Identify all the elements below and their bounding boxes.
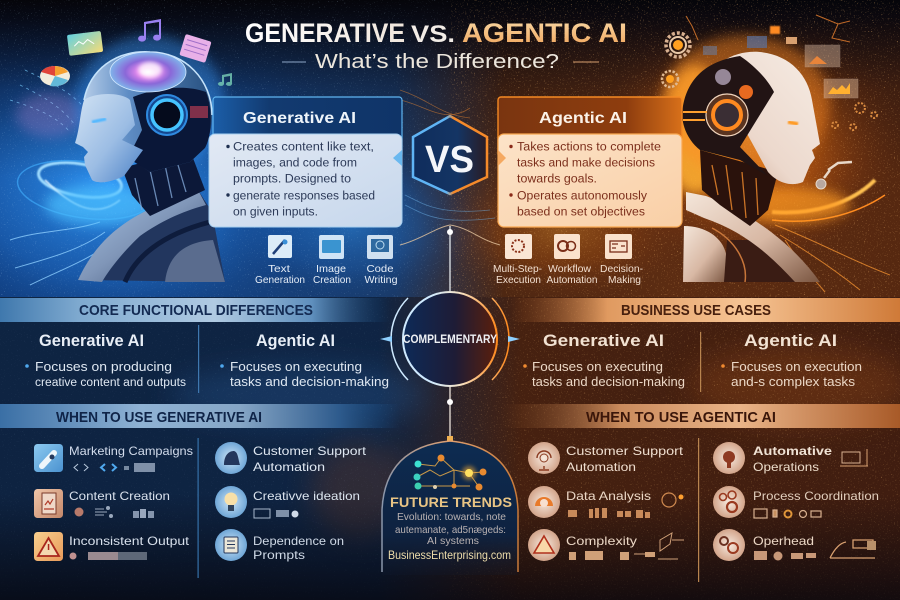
- bullet text: and-s complex tasks: [731, 374, 855, 389]
- item: process coordination: [713, 486, 879, 518]
- panel body with description: towards goals.: [517, 172, 597, 186]
- website: BusinessEnterprising.com: [388, 548, 511, 562]
- item: creative ideation: [215, 486, 360, 518]
- title: AGENTIC AI: [462, 18, 627, 48]
- label: decision making: Making: [608, 274, 641, 286]
- floating agentic icons: [662, 15, 877, 189]
- item: customer support automation: Customer Support: [566, 444, 684, 458]
- item: overhead: Operhead: [753, 534, 814, 548]
- label: code writing: Code: [366, 263, 394, 275]
- icon: robot arm: [816, 162, 852, 189]
- capability icons: agentic: [493, 234, 643, 286]
- list: agentic use cases, first column: [528, 442, 684, 561]
- item: complexity: Complexity: [566, 534, 637, 548]
- heading band: when to use generative AI: WHEN TO USE GENERATIVE AI: [56, 409, 262, 426]
- item: customer support automation: Customer Support: [253, 444, 367, 458]
- shoulder: [78, 190, 225, 282]
- bullet text: Focuses on executing: [532, 359, 663, 374]
- label: multi-step execution: Multi-Step-: [493, 263, 542, 275]
- VS hexagon: [413, 116, 487, 194]
- face: [75, 94, 143, 182]
- item: overhead: [713, 529, 876, 561]
- icon: image card: [67, 31, 103, 56]
- bullet text: tasks and decision-making: [230, 374, 389, 389]
- icon: decision making: [605, 234, 632, 259]
- capability icons: generative: [255, 235, 398, 286]
- panel body with description: [209, 134, 402, 227]
- mechanical skull interior: [128, 88, 211, 172]
- label: workflow automation: Automation: [546, 274, 598, 286]
- floating media icons: [40, 19, 232, 86]
- item: dependence on prompts: Prompts: [253, 548, 305, 562]
- bullet text: tasks and decision-making: [532, 374, 685, 389]
- bullet text: [220, 359, 389, 389]
- label: decision making: [600, 263, 643, 286]
- title: GENERATIVE: [245, 18, 405, 48]
- skull glass dome: [84, 52, 212, 172]
- item: inconsistent output: [34, 532, 190, 561]
- heading: agentic: Agentic AI: [744, 331, 837, 350]
- label: image creation: [313, 263, 351, 286]
- label: multi-step execution: Execution: [496, 274, 541, 286]
- item: automative operations: Automative: [753, 444, 832, 458]
- heading band: core functional differences: [0, 298, 390, 322]
- label: code writing: [364, 263, 398, 286]
- complementary ring: [380, 292, 520, 386]
- robot: agentic AI head: [660, 35, 890, 292]
- heading: Agentic AI: Agentic AI: [539, 110, 627, 127]
- label: text generation: Generation: [255, 274, 305, 286]
- heading band: business use cases: [510, 298, 900, 322]
- panel body with description: Operates autonomously: [517, 188, 648, 202]
- item: creative ideation: Creativve ideation: [253, 489, 360, 503]
- heading band: business use cases: BUSINESS USE CASES: [621, 302, 771, 319]
- icon: area chart panel: [805, 45, 840, 67]
- item: process coordination: Process Coordination: [753, 489, 879, 503]
- description: AI systems: [427, 535, 479, 547]
- list: generative use cases, first column: [34, 444, 193, 561]
- description: autemanate, ad5nægeds:: [395, 524, 506, 536]
- heading band: when to use agentic AI: [500, 404, 900, 428]
- panel: Generative AI: [209, 97, 402, 227]
- list: generative use cases, second column: [215, 442, 367, 562]
- panel body with description: [498, 134, 682, 227]
- column: core differences: [25, 325, 389, 393]
- connector line with nodes: [447, 226, 453, 444]
- panel body with description: based on set objectives: [517, 204, 645, 218]
- icon: workflow automation: [554, 234, 580, 259]
- panel body with description: on given inputs.: [233, 204, 318, 218]
- bullet text: Focuses on executing: [230, 359, 362, 374]
- list: agentic use cases, second column: [713, 442, 879, 561]
- network graphic: [414, 454, 486, 490]
- item: customer support automation: [215, 442, 367, 474]
- panel body with description: images, and code from: [233, 156, 357, 170]
- robot: generative AI head: [10, 35, 225, 285]
- glowing brain: [110, 52, 186, 92]
- icon: image creation: [319, 235, 344, 259]
- label: text generation: [255, 263, 305, 286]
- bullet text: [25, 359, 186, 389]
- bullet text: [523, 359, 685, 389]
- item: data analysis: [528, 486, 684, 518]
- label: workflow automation: Workflow: [548, 263, 591, 275]
- bullet text: Focuses on producing: [35, 359, 172, 374]
- swirl and sparks: [772, 180, 890, 292]
- item: customer support automation: Automation: [566, 460, 636, 474]
- heading band: when to use generative AI: [0, 404, 400, 428]
- item: automative operations: [713, 442, 868, 474]
- label: text generation: Text: [268, 263, 290, 275]
- mechanical skull section: [682, 56, 774, 176]
- icon: music note: [138, 19, 161, 42]
- item: content creation: Content Creation: [69, 489, 170, 503]
- item: marketing campaigns: [34, 444, 193, 472]
- icon: small note: [218, 73, 232, 86]
- title: [245, 18, 627, 48]
- neck: [122, 150, 205, 216]
- icon: small gear: [662, 71, 678, 87]
- heading: generative: Generative AI: [543, 331, 664, 350]
- icon: document: [179, 34, 212, 63]
- label: decision making: Decision-: [600, 263, 643, 275]
- item: content creation: [34, 489, 170, 518]
- icon: multi-step execution: [505, 234, 532, 259]
- description: Evolution: towards, note: [397, 511, 506, 523]
- item: dependence on prompts: Dependence on: [253, 534, 344, 548]
- bullet text: creative content and outputs: [35, 377, 186, 389]
- energy waves behind panels: [400, 90, 500, 245]
- icon: screens: [703, 26, 797, 55]
- icon: node network: [686, 15, 850, 42]
- heading band: when to use agentic AI: WHEN TO USE AGENTIC AI: [586, 409, 776, 426]
- subtitle: What’s the Difference?: [315, 50, 559, 73]
- bullet text: [721, 359, 862, 389]
- column: business use cases: [523, 331, 862, 392]
- complementary ring: COMPLEMENTARY: [403, 334, 497, 346]
- item: complexity: [528, 529, 684, 561]
- item: dependence on prompts: [215, 529, 344, 562]
- panel body with description: prompts. Designed to: [233, 172, 351, 186]
- icon: bar chart panel: [824, 79, 858, 98]
- panel: Agentic AI: [498, 97, 682, 227]
- heading: future trends: FUTURE TRENDS: [390, 494, 512, 510]
- swirl and data streams: [10, 70, 156, 285]
- label: workflow automation: [546, 263, 598, 286]
- item: customer support automation: Automation: [253, 460, 325, 474]
- panel body with description: tasks and make decisions: [517, 156, 655, 170]
- heading band: core functional differences: CORE FUNCTIONAL DIFFERENCES: [79, 302, 313, 319]
- icon: text generation: [268, 235, 292, 258]
- label: code writing: Writing: [364, 274, 398, 286]
- label: image creation: Image: [316, 263, 346, 275]
- item: inconsistent output: Inconsistent Output: [69, 534, 190, 548]
- heading: agentic: Agentic AI: [256, 331, 335, 350]
- ear ring: [146, 94, 188, 136]
- neck: [700, 150, 778, 226]
- icon: large gear: [666, 33, 690, 57]
- label: multi-step execution: [493, 263, 542, 286]
- item: marketing campaigns: Marketing Campaigns: [69, 444, 193, 458]
- VS hexagon: VS: [425, 139, 474, 181]
- ear ring: [706, 94, 748, 136]
- description: [395, 511, 506, 547]
- icon: code writing: [367, 235, 393, 259]
- item: data analysis: Data Analysis: [566, 489, 651, 503]
- bullet text: Focuses on execution: [731, 359, 862, 374]
- item: automative operations: Operations: [753, 460, 819, 474]
- card: future trends: [382, 441, 518, 575]
- title: VS.: [411, 21, 455, 48]
- icon: pie chart: [40, 66, 70, 86]
- panel body with description: Creates content like text,: [233, 140, 374, 154]
- label: image creation: Creation: [313, 274, 351, 286]
- panel body with description: generate responses based: [233, 188, 375, 202]
- panel body with description: Takes actions to complete: [517, 140, 661, 154]
- heading: generative: Generative AI: [39, 331, 144, 350]
- item: customer support automation: [528, 442, 684, 474]
- white skull and face: [700, 52, 820, 184]
- heading: Generative AI: Generative AI: [243, 110, 356, 127]
- shoulder: [683, 226, 727, 282]
- icon: small gears: [832, 103, 877, 130]
